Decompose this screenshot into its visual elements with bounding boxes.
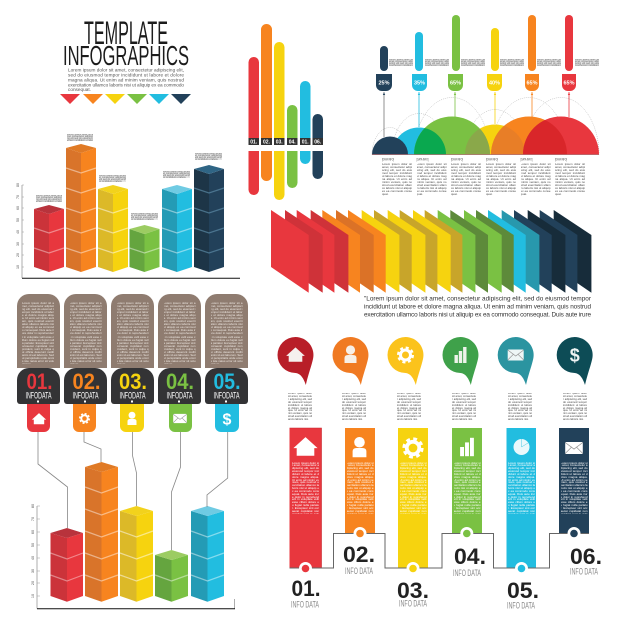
- step numbers and info labels: INFO DATA: [291, 600, 319, 610]
- domes: [372, 116, 599, 154]
- chart axis: 30: [16, 242, 20, 246]
- title: TEMPLATE: [84, 15, 168, 51]
- chart axis: 30: [31, 569, 35, 573]
- chart axis: 70: [31, 517, 35, 521]
- stepped connector line: [290, 534, 589, 568]
- chart axis: 80: [31, 504, 35, 508]
- pill labels: 06.: [314, 140, 322, 146]
- chart axis: 20: [16, 253, 20, 257]
- data info columns: Lorem ipsum dolor sit amet, consectetur adipiscing elit, sed do eiusmod tempor incididunt ut labore et dolore magna aliqua. Ut enim ad minim veniam, quis nostrud exercitation ullamco laboris nisi ut aliquip ex ea commodo consequat.: [520, 162, 550, 196]
- bar: red: [50, 528, 83, 602]
- semicircle percentage chart: [372, 97, 600, 155]
- chart axis: [16, 183, 240, 278]
- icon tab: house: [27, 404, 50, 432]
- bar: navy: [194, 165, 224, 272]
- intro text block: magna aliqua. Ut enim ad minim veniam, quis nostrud: [68, 78, 184, 82]
- data info columns: Lorem ipsum dolor sit amet, consectetur adipiscing elit, sed do eiusmod tempor incididunt ut labore et dolore magna aliqua. Ut enim ad minim veniam, quis nostrud exercitation ullamco laboris nisi ut aliquip ex ea commodo consequat.: [416, 162, 446, 196]
- number block: [17, 368, 60, 404]
- info card 05: [205, 294, 248, 432]
- data info columns: [382, 158, 585, 196]
- vertical pill bars: [246, 24, 326, 200]
- card body: [158, 294, 201, 368]
- icon tab: person: [120, 404, 144, 432]
- data info columns: [DATA INFO]: [382, 158, 394, 162]
- step numbers and info labels: 04.: [454, 544, 486, 569]
- icon tab: dollar: $: [223, 412, 232, 428]
- number block: INFODATA: [72, 390, 99, 401]
- chart axis: 10: [31, 594, 35, 598]
- card body: [111, 294, 154, 368]
- bar: green: [130, 225, 160, 272]
- number block: 05.: [214, 369, 240, 394]
- step numbers and info labels: INFO DATA: [570, 566, 598, 576]
- pin: 65% red: 65%: [563, 80, 575, 86]
- chart axis: 40: [16, 230, 20, 234]
- data info columns: Lorem ipsum dolor sit amet, consectetur adipiscing elit, sed do eiusmod tempor incididunt ut labore et dolore magna aliqua. Ut enim ad minim veniam, quis nostrud exercitation ullamco laboris nisi ut aliquip ex ea commodo consequat.: [382, 162, 412, 196]
- chart axis: 60: [31, 530, 35, 534]
- title: INFOGRAPHICS: [63, 40, 189, 71]
- number block: [158, 368, 201, 404]
- colour triangles: [60, 94, 191, 104]
- pill labels: 04.: [289, 140, 296, 146]
- panel 06: [559, 428, 589, 534]
- pin side labels: [389, 59, 599, 66]
- number block: 02.: [72, 369, 100, 394]
- bar: blue: [191, 506, 224, 602]
- number block: INFODATA: [166, 390, 193, 401]
- pin captions: [288, 393, 587, 420]
- pin: 65% green: [448, 15, 463, 117]
- pill labels: 01.: [250, 140, 258, 146]
- pill labels: [248, 138, 323, 146]
- step numbers and info labels: 05.: [507, 578, 539, 603]
- card body: [205, 294, 248, 368]
- pin: bars: [442, 337, 478, 385]
- info card 03: [111, 294, 154, 432]
- bar labels: [36, 134, 222, 220]
- card body: [64, 294, 107, 368]
- data info columns: [DATA INFO]: [451, 158, 463, 162]
- pill labels: 02.: [263, 140, 271, 146]
- pin: 35%: 35%: [414, 80, 425, 86]
- panel 02: [345, 428, 375, 534]
- bar: red: [34, 205, 64, 272]
- pin: 35%: [412, 32, 427, 127]
- chart axis: 50: [31, 543, 35, 547]
- step numbers and info labels: INFO DATA: [399, 598, 427, 608]
- chart axis: 80: [16, 183, 20, 187]
- pin: 25%: 25%: [378, 80, 390, 86]
- number block: [64, 368, 107, 404]
- bar: yellow: [98, 185, 128, 272]
- pin: 40%: 40%: [489, 80, 500, 86]
- pill labels: 03.: [276, 140, 283, 146]
- chart axis: 40: [31, 556, 35, 560]
- tall colour panels: [290, 428, 589, 568]
- chart axis: [31, 504, 235, 609]
- step numbers and info labels: INFO DATA: [507, 600, 535, 610]
- intro text block: Lorem ipsum dolor sit amet, consectetur adipiscing elit,: [68, 68, 184, 73]
- connector nodes: [299, 527, 580, 575]
- panel 03: [398, 428, 428, 568]
- pin: 65% green: 65%: [450, 80, 461, 86]
- chart axis: 20: [31, 581, 35, 585]
- step numbers and info labels: INFO DATA: [345, 566, 373, 576]
- info card 04: [158, 294, 201, 432]
- dotted arcs: [372, 97, 599, 154]
- icon tab: envelope: [169, 404, 192, 432]
- pin: 65% orange: [525, 15, 539, 117]
- title: [63, 15, 189, 71]
- chart axis: 70: [16, 195, 20, 199]
- data info columns: [DATA INFO]: [416, 158, 429, 162]
- step numbers and info labels: 02.: [343, 542, 375, 567]
- pill labels: 01.: [302, 140, 309, 146]
- pin: 65% orange: 65%: [526, 80, 538, 86]
- bar chart: bottom left: [31, 462, 235, 609]
- chart axis: 60: [16, 206, 20, 210]
- data info columns: [DATA INFO]: [486, 158, 498, 162]
- pin: dollar: [557, 337, 593, 385]
- number block: 01.: [26, 369, 52, 394]
- data info columns: Lorem ipsum dolor sit amet, consectetur adipiscing elit, sed do eiusmod tempor incididunt ut labore et dolore magna aliqua. Ut enim ad minim veniam, quis nostrud exercitation ullamco laboris nisi ut aliquip ex ea commodo consequat.: [555, 162, 585, 196]
- ribbon caption: incididunt ut labore et dolore magna aliqua. Ut enim ad minim veniam, quis nostrud: [364, 303, 591, 310]
- step numbers and info labels: INFO DATA: [453, 568, 481, 578]
- connector lines from tabs to bars: [38, 432, 228, 550]
- ribbon caption: [364, 295, 592, 318]
- info card 02: [64, 294, 107, 432]
- panel 01: [290, 428, 322, 568]
- chart axis: 50: [16, 218, 20, 222]
- intro text block: sed do eiusmod tempor incididunt ut labore et dolore: [68, 73, 184, 78]
- data info columns: Lorem ipsum dolor sit amet, consectetur adipiscing elit, sed do eiusmod tempor incididunt ut labore et dolore magna aliqua. Ut enim ad minim veniam, quis nostrud exercitation ullamco laboris nisi ut aliquip ex ea commodo consequat.: [486, 162, 516, 196]
- panel 05: [506, 428, 536, 568]
- card body: [17, 294, 60, 368]
- icon tab: gear: [73, 404, 96, 432]
- step numbers and info labels: [291, 542, 602, 610]
- map pin icons: [278, 337, 593, 385]
- number block: 03.: [119, 369, 147, 394]
- data info columns: [DATA INFO]: [520, 158, 533, 162]
- number block: [111, 368, 154, 404]
- intro text block: consequat.: [68, 87, 91, 92]
- number block: 04.: [166, 369, 194, 394]
- number block: INFODATA: [214, 390, 240, 401]
- pin: house: [278, 337, 313, 385]
- step numbers and info labels: 01.: [292, 576, 320, 601]
- number block: INFODATA: [120, 390, 146, 401]
- info card 01: [17, 294, 60, 432]
- chart axis: 10: [16, 265, 20, 269]
- ribbon caption: "Lorem ipsum dolor sit amet, consectetur adipiscing elit, sed do eiusmod tempor: [364, 295, 592, 302]
- pin: person: [332, 337, 368, 385]
- pin: envelope: [498, 337, 534, 385]
- number block: INFODATA: [26, 390, 52, 401]
- pin: 65% red: [562, 15, 576, 117]
- ribbon caption: exercitation ullamco laboris nisi ut aliquip ex ea commodo consequat. Duis aute irure: [364, 311, 591, 318]
- number block: [205, 368, 248, 404]
- pin: 25%: [376, 46, 392, 137]
- pin: 40%: [487, 28, 502, 124]
- step numbers and info labels: 06.: [570, 544, 602, 569]
- bar: yellow: [120, 506, 153, 602]
- bar chart: top left: [16, 134, 240, 278]
- pin: gear: [388, 337, 423, 385]
- bar: blue: [162, 185, 192, 272]
- pin: dollar: $: [570, 346, 580, 366]
- intro text block: [68, 68, 184, 92]
- data info columns: Lorem ipsum dolor sit amet, consectetur adipiscing elit, sed do eiusmod tempor incididunt ut labore et dolore magna aliqua. Ut enim ad minim veniam, quis nostrud exercitation ullamco laboris nisi ut aliquip ex ea commodo consequat.: [451, 162, 481, 196]
- bar: green: [155, 550, 188, 602]
- panel 04: [452, 428, 482, 534]
- bar: orange: [66, 144, 96, 272]
- data info columns: [DATA INFO]: [555, 158, 567, 162]
- folded ribbon: [271, 210, 591, 293]
- percentage pins and stems: [376, 15, 599, 137]
- bar: orange: [85, 462, 118, 602]
- intro text block: exercitation ullamco laboris nisi ut aliquip ex ea commodo: [68, 82, 184, 87]
- step numbers and info labels: 03.: [397, 578, 429, 603]
